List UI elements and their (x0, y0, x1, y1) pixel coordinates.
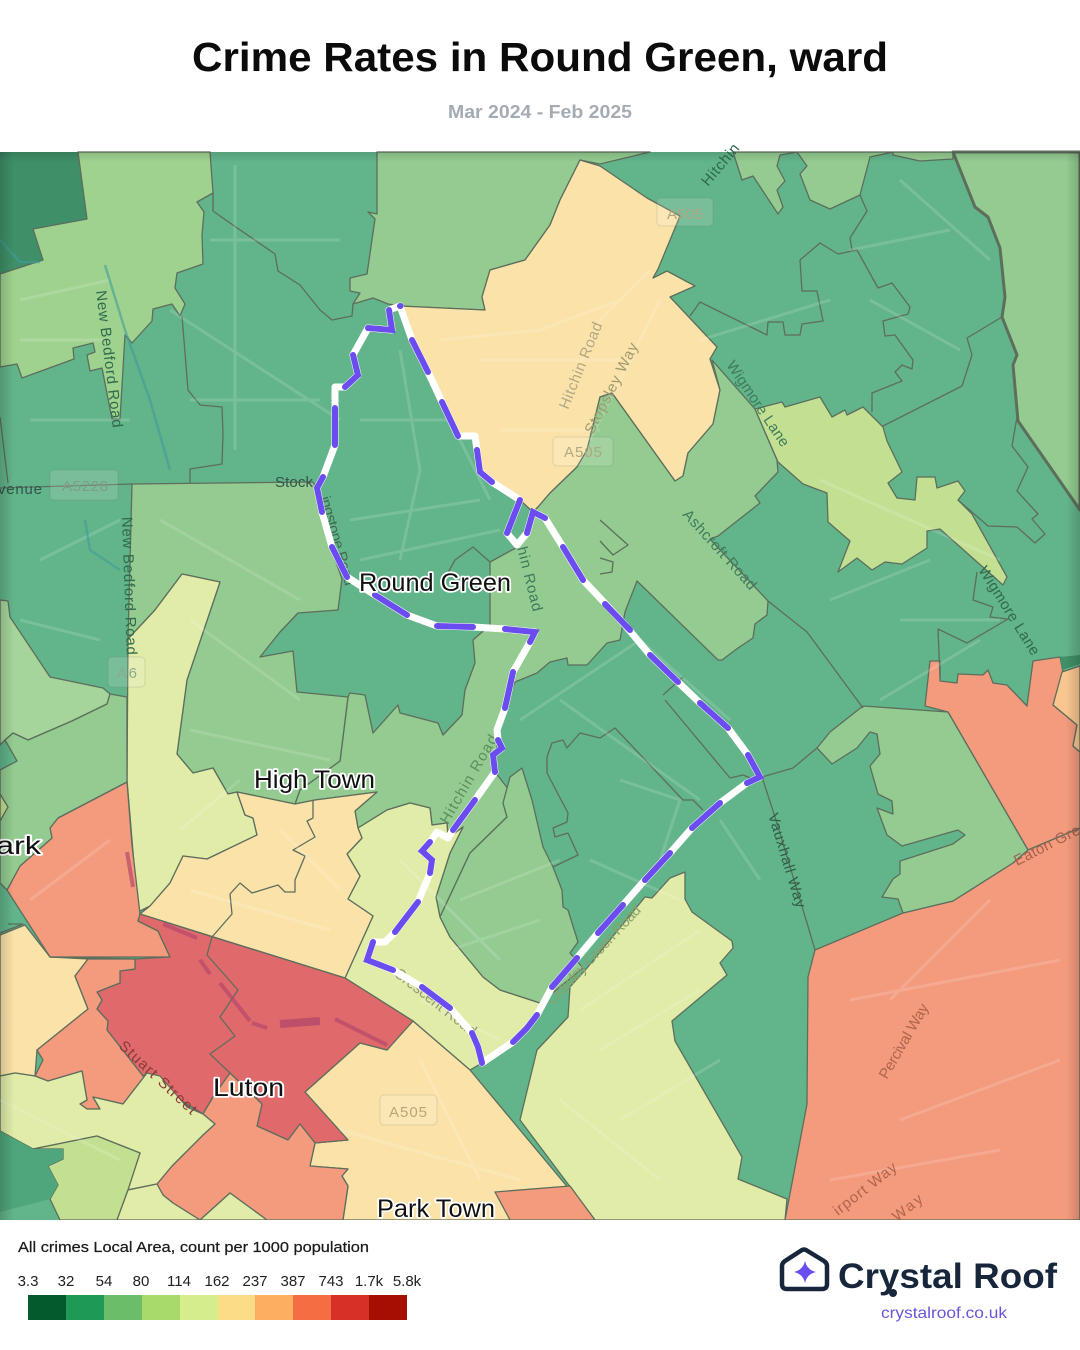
map road labels: Percival Way (876, 1000, 933, 1082)
place labels (0, 569, 511, 1223)
legend scale labels: 1.7k (355, 1273, 384, 1290)
map road labels: Vauxhall Way (764, 811, 809, 910)
map road labels: A505 (389, 1104, 427, 1121)
map road labels: Crawley Green Road (543, 902, 645, 1009)
place labels: Park Town (377, 1195, 495, 1223)
map road labels: A5228 (62, 478, 108, 495)
minor road network (0, 165, 1060, 1180)
logo y descender dot (889, 1289, 897, 1297)
map road labels: New Bedford Road (92, 289, 126, 428)
legend scale labels: 114 (167, 1273, 191, 1290)
ward boundary: white line (317, 306, 760, 1063)
map road labels: Hitchin Road (556, 320, 606, 411)
legend scale labels: 54 (96, 1273, 112, 1290)
legend title: All crimes Local Area, count per 1000 population (18, 1239, 369, 1256)
map edge vignette (0, 152, 1080, 1220)
railway platform (280, 1021, 320, 1024)
ward sub-area outlines (0, 193, 1045, 1073)
map road labels: irport Way (830, 1159, 901, 1219)
place labels: Round Green (359, 569, 511, 597)
legend scale labels: 5.8k (393, 1273, 422, 1290)
ward boundary: purple dashes (317, 306, 760, 1063)
legend scale labels: 743 (318, 1273, 344, 1290)
map road labels: Way (889, 1191, 927, 1225)
map road labels: ingstone Road (316, 494, 358, 588)
map road labels: hin Road (513, 545, 546, 613)
map road labels: Ashcroft Road (679, 506, 760, 593)
legend colour ramp (28, 1295, 407, 1320)
river (0, 240, 170, 570)
map road labels: Stopsley Way (581, 340, 642, 437)
map road labels: A505 (564, 444, 602, 461)
map road labels: A505 (667, 206, 703, 223)
legend scale labels: 387 (280, 1273, 306, 1290)
legend scale labels: 32 (58, 1273, 74, 1290)
place labels: High Town (254, 766, 375, 794)
legend (18, 1239, 422, 1320)
map road labels: Hitchin Road (437, 732, 501, 827)
road shields (50, 198, 713, 1125)
map road labels: Wigmore Lane (975, 563, 1043, 659)
legend scale labels: 80 (133, 1273, 149, 1290)
map road labels: Crescent Road (391, 965, 480, 1040)
map road labels: Hitchin (698, 140, 743, 190)
legend scale labels (18, 1273, 422, 1290)
map areas: crime rate polygons (0, 152, 1080, 1220)
place labels: Luton (213, 1074, 284, 1102)
railway track through Luton (127, 852, 387, 1045)
map road labels: Wigmore Lane (723, 358, 793, 450)
footer background (0, 1220, 1080, 1350)
legend scale labels: 237 (242, 1273, 268, 1290)
brand url: crystalroof.co.uk (881, 1305, 1008, 1322)
map road labels: Stuart Street (115, 1037, 201, 1119)
icon: house with star (782, 1250, 827, 1289)
title: Crime Rates in Round Green, ward (192, 34, 888, 80)
subtitle: date range: Mar 2024 - Feb 2025 (448, 102, 632, 122)
brand logo (782, 1250, 1057, 1322)
map road labels: A6 (117, 665, 137, 682)
legend scale labels: 3.3 (18, 1273, 38, 1290)
map road labels: New Bedford Road (118, 517, 140, 655)
legend scale labels: 162 (204, 1273, 230, 1290)
map road labels: Stock (275, 474, 314, 491)
brand name: Crystal Roof (838, 1257, 1057, 1296)
